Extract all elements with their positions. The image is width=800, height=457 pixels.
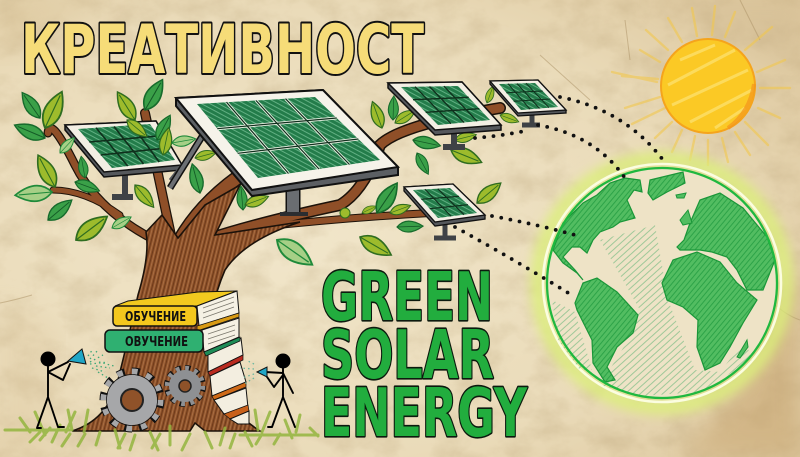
heading: green solar energy [321, 258, 528, 452]
lower book stack [208, 338, 249, 424]
leaves [12, 76, 520, 272]
title: КРЕАТИВНОСТ [21, 11, 424, 90]
small gear [168, 369, 202, 403]
continent: South America [575, 278, 638, 382]
globe outline [547, 168, 777, 398]
grass [5, 410, 318, 450]
continent: Africa [662, 252, 757, 370]
dotted lines: panels to globe [455, 97, 663, 294]
solar panel: top middle [388, 82, 501, 147]
book title: green: ОВУЧЕНИЕ [125, 334, 188, 350]
large gear [105, 373, 159, 427]
trunk [72, 185, 300, 431]
stack of books [105, 291, 249, 424]
continent: Eurasia [677, 193, 775, 290]
icon: glowing globe [538, 159, 786, 407]
islands [676, 193, 748, 358]
book title: yellow: ОБУЧЕНИЕ [125, 309, 186, 325]
yellow book [113, 291, 239, 331]
heading line: energy: ENERGY [321, 374, 528, 452]
tree: trunk and branches [48, 108, 500, 431]
solar panel: large [170, 90, 398, 214]
stick figure with megaphone: right [240, 354, 295, 427]
stick figure with megaphone: left [37, 349, 114, 428]
icon: sun [612, 6, 790, 165]
heading line: green: GREEN [321, 258, 493, 336]
solar panel: lower [404, 184, 485, 238]
green book [105, 318, 240, 356]
heading line: solar: SOLAR [321, 316, 494, 394]
continent: Greenland [648, 172, 685, 200]
solar panel: left, behind tree [65, 121, 182, 197]
continent: North America [553, 178, 642, 280]
gears [105, 369, 202, 427]
solar panel: top right [490, 80, 566, 125]
